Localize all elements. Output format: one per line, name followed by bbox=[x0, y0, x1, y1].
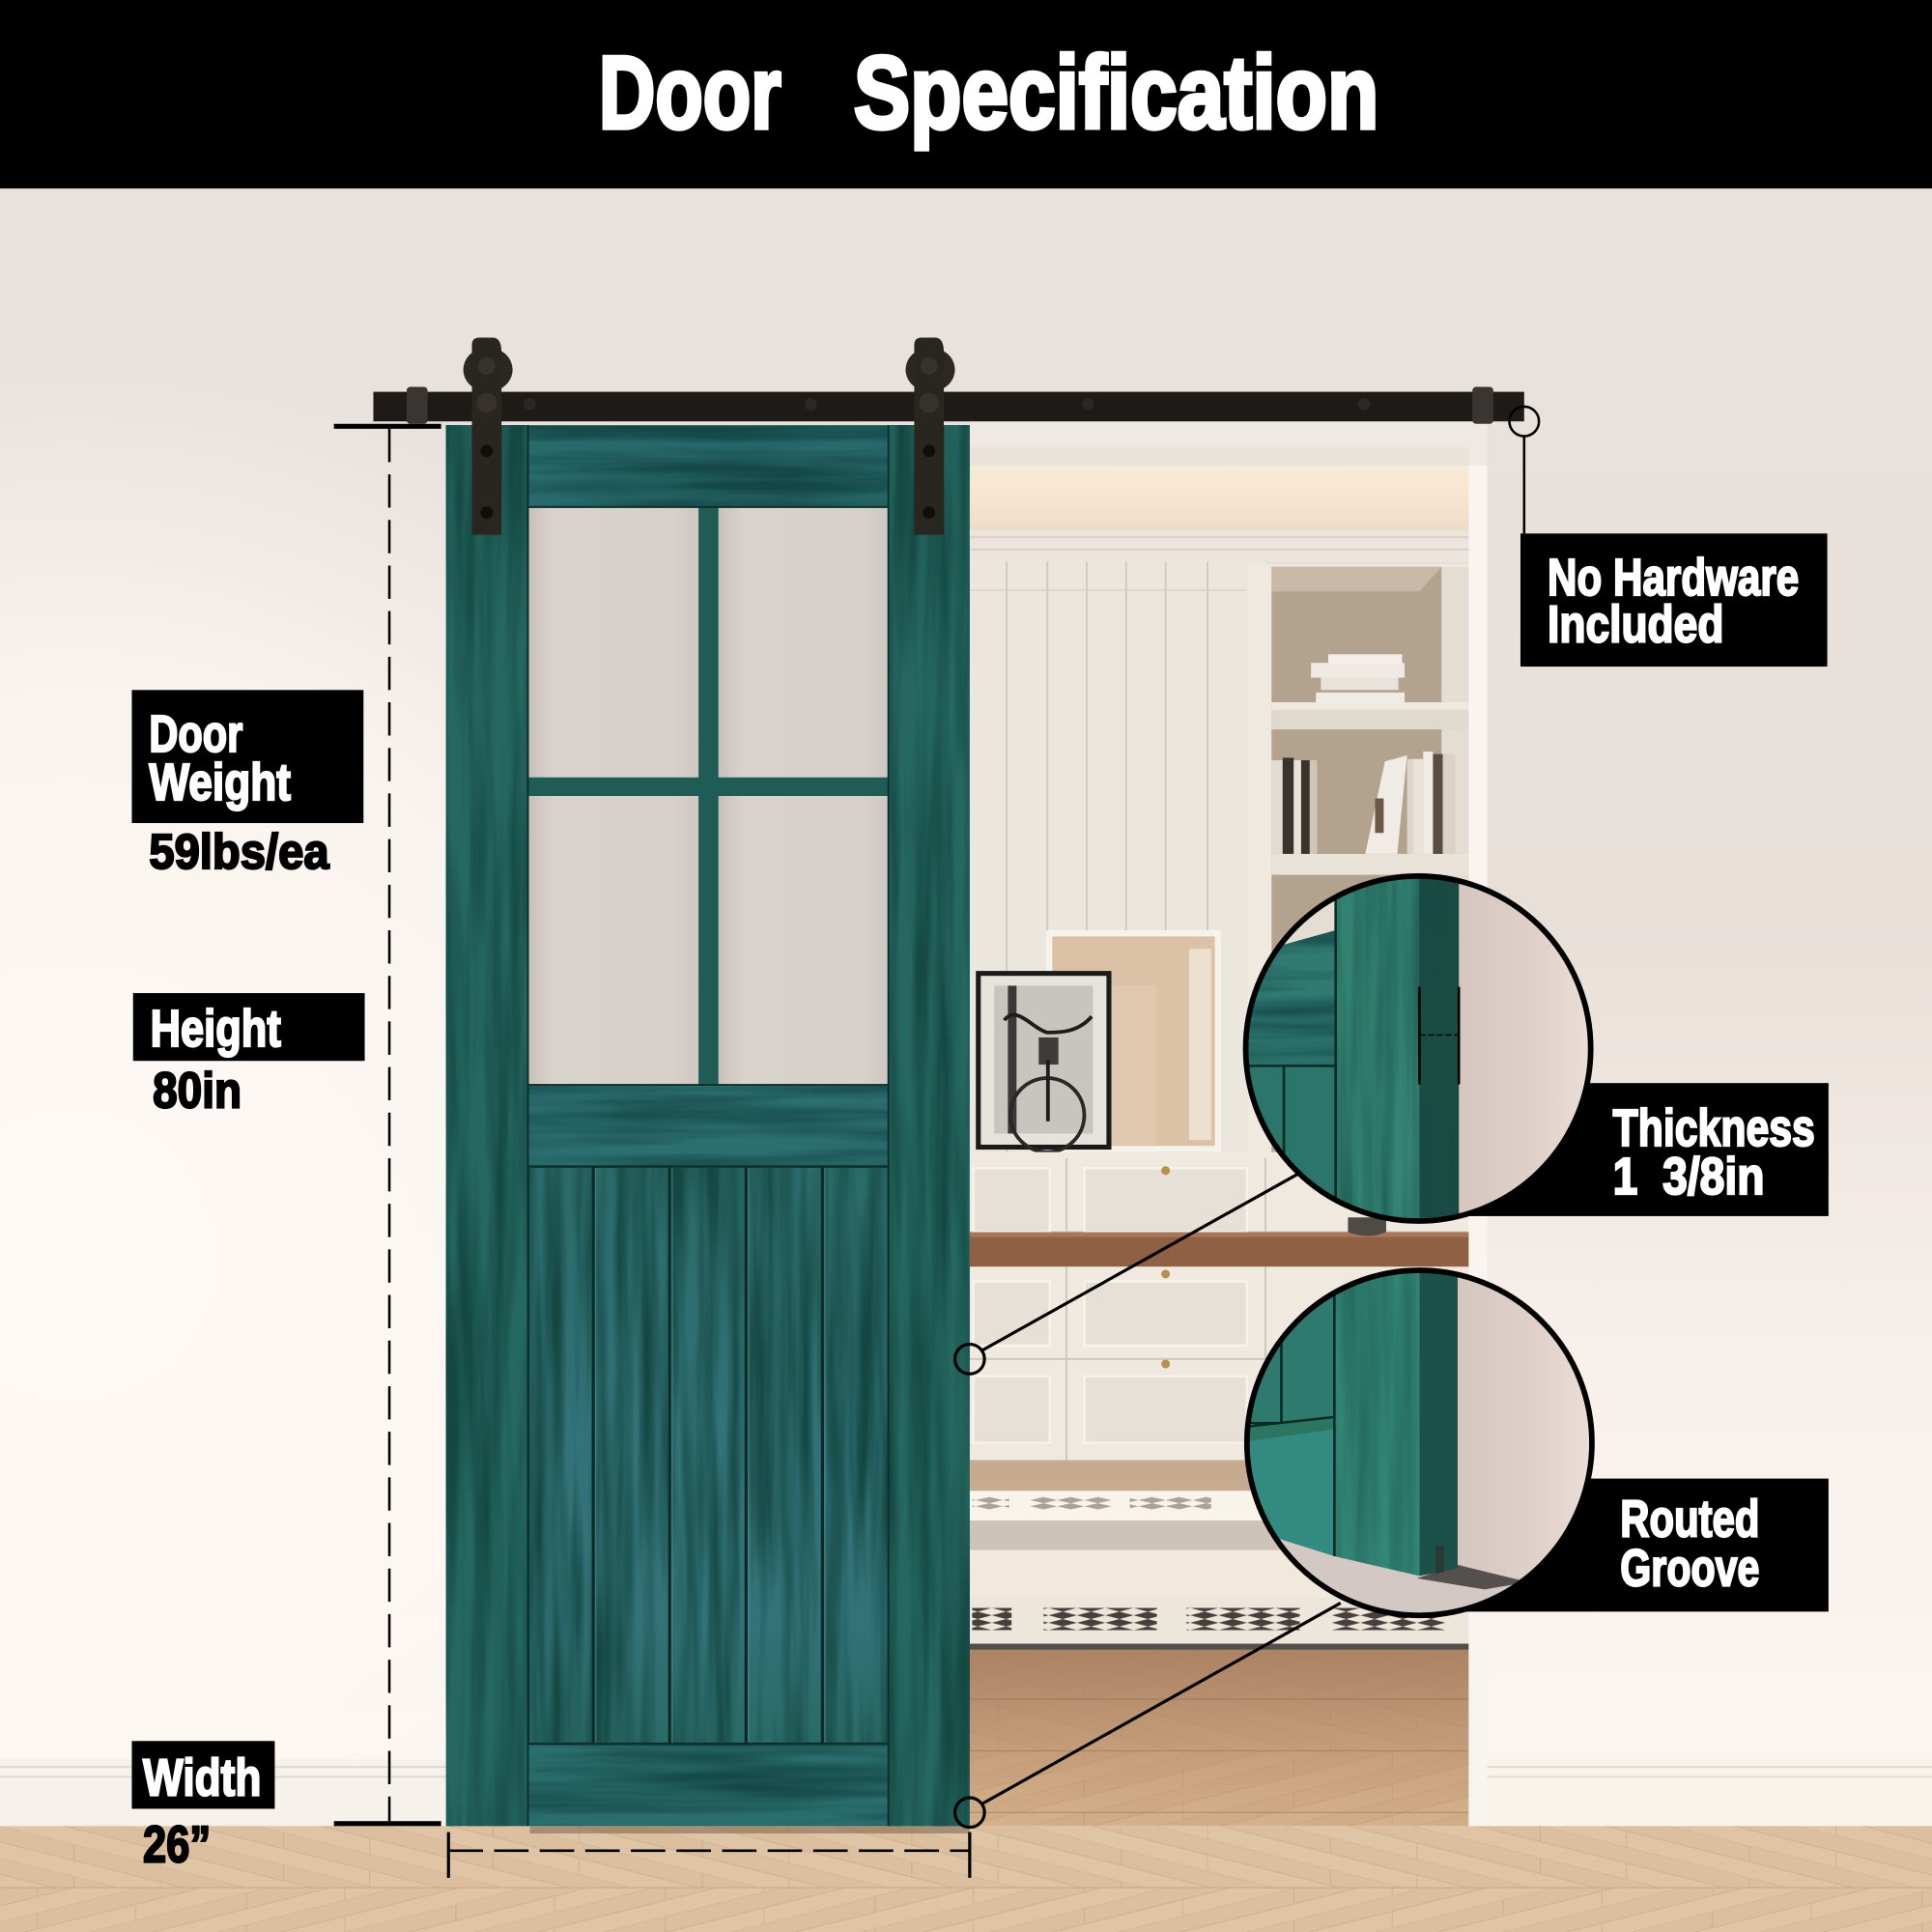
label: height: Height bbox=[151, 1001, 281, 1058]
rug pattern upper bbox=[972, 1497, 1211, 1509]
sliding track rail bbox=[373, 387, 1524, 424]
callout: no hardware included: No Hardware bbox=[1548, 550, 1799, 607]
baseboard bbox=[0, 1759, 1932, 1826]
floor bbox=[0, 1826, 1932, 1932]
routed groove notch bbox=[1435, 1545, 1444, 1574]
detail circle: routed groove bbox=[1233, 1263, 1602, 1627]
callout: thickness label: 1 3/8in bbox=[1613, 1149, 1765, 1206]
stile face bbox=[1336, 875, 1419, 1226]
label: door weight: Door bbox=[149, 706, 242, 763]
bottom rail bbox=[528, 1745, 889, 1825]
floor bbox=[1233, 1528, 1602, 1627]
callout: thickness label: Thickness bbox=[1613, 1100, 1815, 1157]
stile face bbox=[1334, 1263, 1419, 1576]
connector to groove detail bbox=[955, 1603, 1341, 1828]
title: Door bbox=[599, 35, 781, 151]
window glass panes bbox=[528, 508, 889, 1084]
callout: routed groove label: Groove bbox=[1620, 1541, 1759, 1598]
panel wall bbox=[970, 562, 1265, 1153]
floor strip, rug bbox=[970, 1460, 1468, 1650]
books: left group bbox=[1271, 757, 1318, 854]
planks bbox=[1250, 1296, 1333, 1424]
callout: routed groove label: Routed bbox=[1620, 1492, 1759, 1548]
door edge bbox=[1419, 875, 1459, 1226]
left hanger bbox=[464, 337, 513, 535]
wood grain bbox=[446, 425, 970, 1826]
brass knobs bbox=[1161, 1166, 1170, 1368]
crown moulding bbox=[970, 529, 1468, 562]
small object on counter bbox=[1348, 1217, 1386, 1236]
label: width: Width bbox=[143, 1749, 261, 1806]
height dimension line bbox=[334, 424, 441, 1826]
wooden countertop bbox=[970, 1233, 1468, 1266]
door edge with groove bbox=[1419, 1263, 1458, 1576]
right hanger bbox=[906, 337, 955, 535]
rail side bbox=[1247, 930, 1336, 1065]
books: stack bbox=[1311, 654, 1405, 702]
callout: routed groove label bbox=[1466, 1479, 1829, 1611]
shelving unit bbox=[1247, 564, 1468, 1155]
ceiling glow bbox=[970, 466, 1468, 529]
interior room seen through the opening bbox=[970, 421, 1488, 1826]
label: door weight: Weight bbox=[149, 754, 291, 811]
books: right group bbox=[1365, 752, 1455, 854]
callout: no hardware included bbox=[1509, 407, 1828, 667]
title bbox=[599, 35, 1378, 151]
planks bbox=[528, 1167, 889, 1744]
cabinets bbox=[970, 1152, 1468, 1460]
track stops bbox=[407, 387, 1493, 424]
muntins bbox=[528, 508, 889, 1084]
thickness marks bbox=[1419, 987, 1459, 1084]
callout: thickness label bbox=[1466, 1083, 1829, 1216]
door floor shadow bbox=[529, 1826, 970, 1833]
detail circle: thickness bbox=[1238, 875, 1595, 1233]
connector to thickness detail bbox=[955, 1175, 1297, 1374]
width dimension line bbox=[448, 1833, 970, 1878]
middle rail bbox=[528, 1086, 889, 1166]
callout: no hardware included: Included bbox=[1548, 597, 1723, 654]
label: height bbox=[133, 993, 365, 1120]
bottom rail bbox=[1250, 1430, 1333, 1556]
planks bbox=[1249, 1065, 1335, 1196]
bicycle photo frame bbox=[976, 971, 1112, 1152]
beige art frame bbox=[1046, 930, 1221, 1152]
label: width bbox=[131, 1741, 274, 1873]
label: door weight: 59lbs/ea bbox=[149, 824, 329, 879]
floor shadow bbox=[1417, 1565, 1528, 1589]
door trim bbox=[970, 421, 1488, 1826]
label: height: 80in bbox=[153, 1064, 242, 1120]
title bar bbox=[0, 0, 1932, 188]
label: door weight bbox=[131, 690, 363, 879]
rug pattern lower bbox=[972, 1608, 1445, 1631]
top rail bbox=[528, 426, 889, 506]
title: Specification bbox=[854, 35, 1378, 151]
label: width: 26” bbox=[143, 1816, 211, 1873]
wall return at trim bbox=[1468, 466, 1488, 1826]
interior parquet bbox=[970, 1650, 1468, 1826]
barn door bbox=[446, 425, 970, 1826]
